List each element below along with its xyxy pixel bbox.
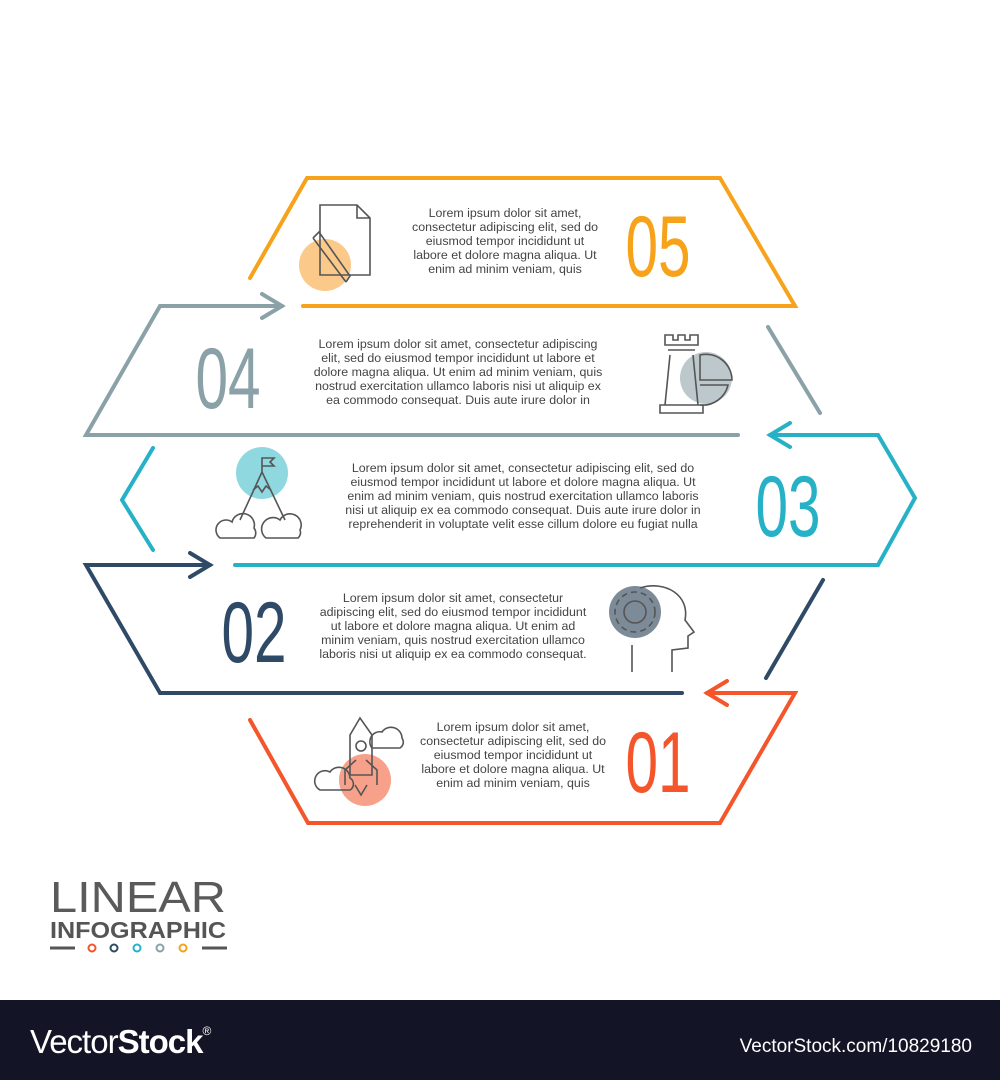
number 01: 01 [625,714,691,811]
text 05 [412,206,598,276]
number 05: 05 [625,198,691,295]
text 03: eiusmod tempor incididunt ut labore et dolore magna aliqua. Ut [350,475,696,489]
text 03: reprehenderit in voluptate velit esse cillum dolore eu fugiat nulla [348,517,698,531]
text 04 [314,337,602,407]
text 04: elit, sed do eiusmod tempor incididunt ut labore et [321,351,595,365]
text 02: Lorem ipsum dolor sit amet, consectetur [343,591,563,605]
text 01: consectetur adipiscing elit, sed do [420,734,606,748]
number 03: 03 [755,458,821,555]
text 02 [319,591,587,661]
footer bar: VectorStock [30,1023,202,1060]
step 04 frame [86,294,820,435]
text 01: labore et dolore magna aliqua. Ut [421,762,605,776]
text 05: enim ad minim veniam, quis [428,262,582,276]
logo: LINEAR INFOGRAPHIC [50,873,227,952]
number 04: 04 [195,330,261,427]
text 01 [420,720,606,790]
text 04: Lorem ipsum dolor sit amet, consectetur adipiscing [319,337,598,351]
icon: mountain with flag [216,447,301,538]
icon: document with pen [299,205,370,291]
footer bar [0,1000,1000,1080]
text 03 [345,461,701,531]
text 04: dolore magna aliqua. Ut enim ad minim veniam, quis [314,365,602,379]
text 03: nisi ut aliquip ex ea commodo consequat. Duis aute irure dolor in [345,503,701,517]
step 01 frame [250,681,795,823]
logo: LINEAR INFOGRAPHIC: INFOGRAPHIC [50,917,226,943]
text 02: adipiscing elit, sed do eiusmod tempor incididunt [320,605,587,619]
number 02: 02 [221,584,287,681]
footer bar: ® [202,1024,211,1038]
text 05: Lorem ipsum dolor sit amet, [429,206,581,220]
text 01: Lorem ipsum dolor sit amet, [437,720,589,734]
text 04: nostrud exercitation ullamco laboris nisi ut aliquip ex [315,379,602,393]
step 05 frame [250,178,795,306]
text 05: consectetur adipiscing elit, sed do [412,220,598,234]
text 04: ea commodo consequat. Duis aute irure dolor in [326,393,590,407]
text 02: ut labore et dolore magna aliqua. Ut enim ad [331,619,575,633]
text 05: labore et dolore magna aliqua. Ut [413,248,597,262]
text 03: enim ad minim veniam, quis nostrud exercitation ullamco laboris [347,489,699,503]
text 01: enim ad minim veniam, quis [436,776,590,790]
text 05: eiusmod tempor incididunt ut [426,234,585,248]
text 02: minim veniam, quis nostrud exercitation ullamco [321,633,585,647]
text 02: laboris nisi ut aliquip ex ea commodo consequat. [319,647,587,661]
text 03: Lorem ipsum dolor sit amet, consectetur adipiscing elit, sed do [352,461,694,475]
icon: head with gear [609,586,694,672]
step 02 frame [86,553,823,693]
icon: rocket with clouds [315,718,403,806]
text 01: eiusmod tempor incididunt ut [434,748,593,762]
footer bar: VectorStock.com/10829180 [740,1036,972,1057]
logo: LINEAR INFOGRAPHIC: LINEAR [50,873,226,922]
icon: chess rook with pie chart [660,335,732,413]
step 03 frame [122,423,915,565]
